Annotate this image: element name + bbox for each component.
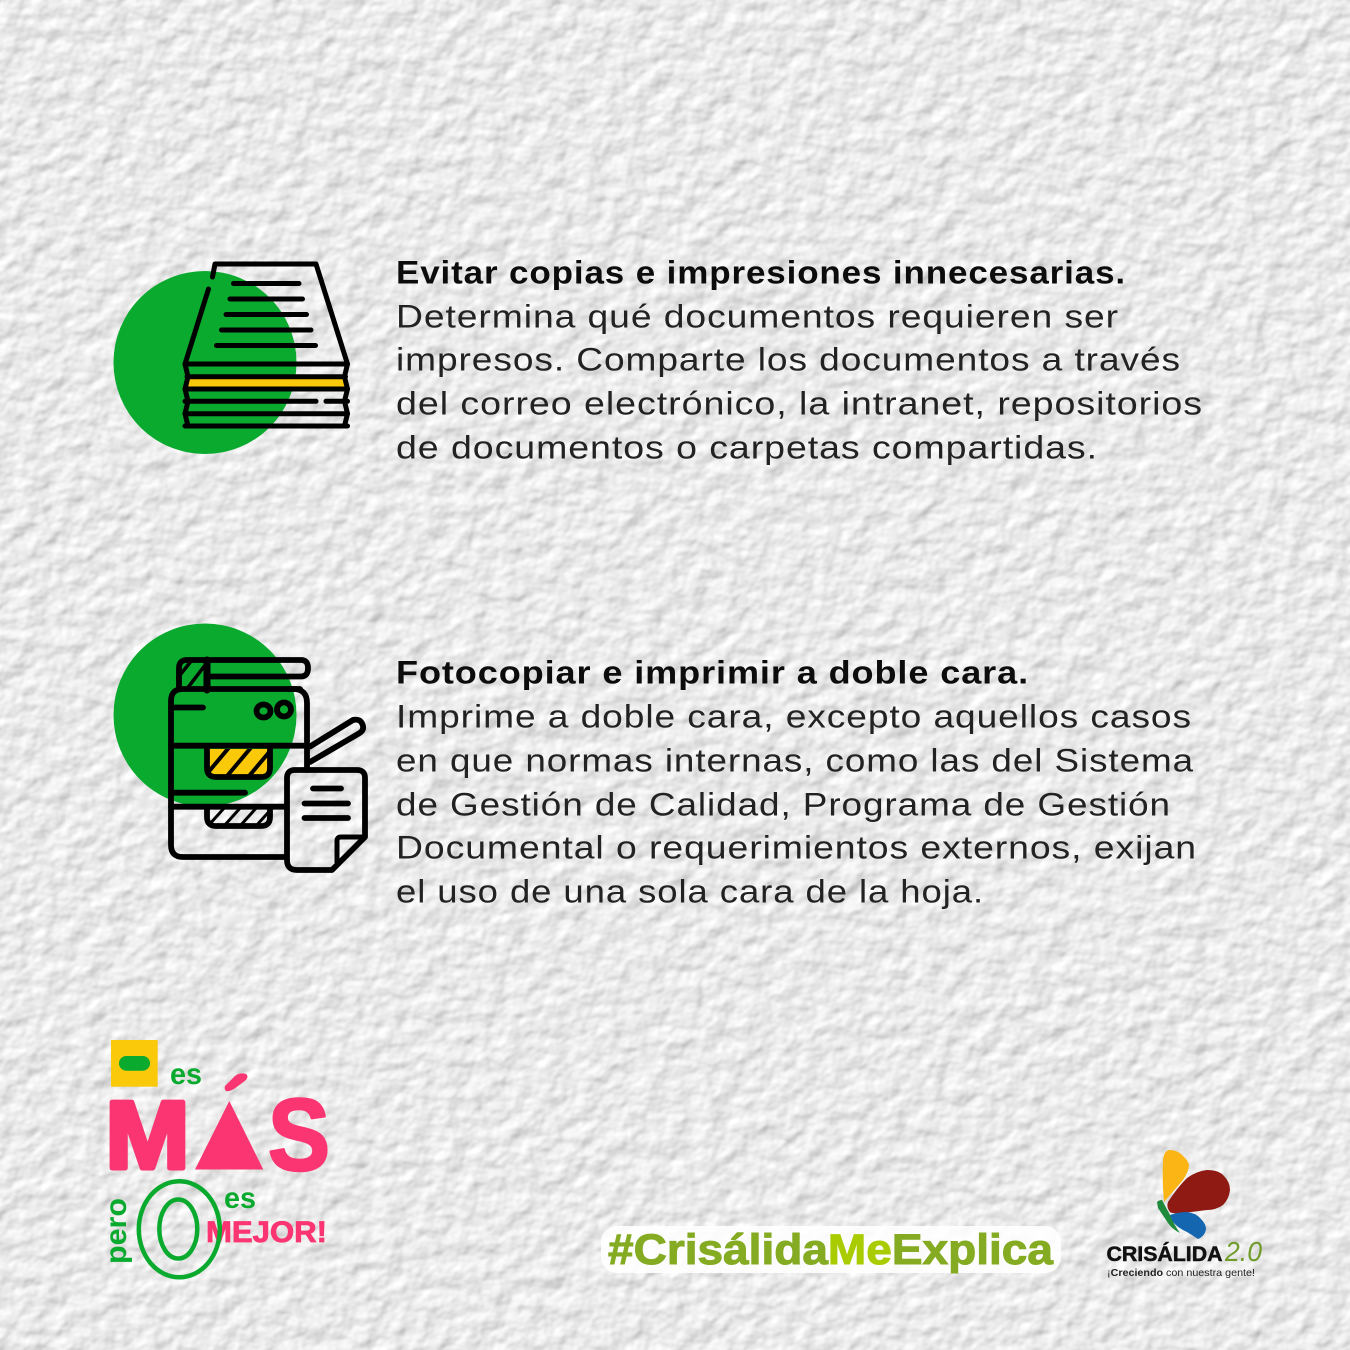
body line 3: de Gestión de Calidad, Programa de Gestión	[396, 786, 1171, 822]
word: MÁS	[106, 1073, 330, 1192]
icon: stack of paper	[114, 264, 348, 454]
icon: photocopier	[114, 624, 365, 870]
green minus pill	[119, 1056, 150, 1071]
tagline: ¡Creciendo con nuestra gente!	[1107, 1267, 1255, 1279]
printer outline	[171, 660, 363, 857]
accent	[225, 1073, 248, 1091]
icon background circle	[114, 624, 296, 806]
scanner hatching	[176, 662, 204, 686]
yellow paper slot	[208, 749, 269, 776]
Crisálida 2.0 logo	[1106, 1150, 1262, 1279]
butterfly icon	[1157, 1150, 1230, 1239]
word: MEJOR!: MEJOR!	[206, 1216, 327, 1249]
lower slot hatching	[210, 810, 268, 824]
body line 1: Determina qué documentos requieren ser	[396, 298, 1119, 334]
red wing	[1167, 1170, 1230, 1213]
triangle letter A	[195, 1101, 263, 1170]
wordmark: CRISÁLIDA: CRISÁLIDA	[1106, 1243, 1222, 1266]
yellow sheet	[188, 377, 344, 389]
slot hatching	[210, 749, 268, 774]
word: es: es	[170, 1058, 202, 1091]
body line 1: Imprime a doble cara, excepto aquellos casos	[396, 698, 1192, 734]
document with folded corner	[287, 770, 365, 870]
yellow wing	[1163, 1150, 1189, 1202]
body line 2: impresos. Comparte los documentos a través	[396, 342, 1181, 378]
blue wing	[1170, 1212, 1206, 1239]
word: pero: pero	[100, 1198, 133, 1264]
green body	[1157, 1200, 1180, 1233]
outer ring	[139, 1181, 220, 1277]
body line 4: de documentos o carpetas compartidas.	[396, 430, 1098, 466]
yellow square	[111, 1040, 158, 1087]
body line 2: en que normas internas, como las del Sistema	[396, 742, 1194, 778]
inner ring	[159, 1200, 197, 1258]
paper outline	[185, 264, 348, 426]
hashtag	[601, 1226, 1061, 1274]
heading: Fotocopiar e imprimir a doble cara.	[396, 654, 1029, 690]
campaign logo: menos es más, pero cero es mejor	[100, 1040, 330, 1277]
panel: evitar copias	[114, 254, 1203, 466]
text: doble cara	[396, 654, 1197, 910]
body line 3: del correo electrónico, la intranet, repositorios	[396, 386, 1203, 422]
body line 4: Documental o requerimientos externos, exijan	[396, 830, 1197, 866]
word: es: es	[224, 1182, 256, 1215]
letter M: M	[106, 1081, 189, 1188]
large zero ring	[139, 1181, 220, 1277]
yellow minus badge	[111, 1040, 158, 1087]
heading: Evitar copias e impresiones innecesarias.	[396, 254, 1126, 290]
version: 2.0: 2.0	[1224, 1236, 1262, 1267]
text: evitar copias	[396, 254, 1203, 466]
hashtag text: #Crisálida MeExplica	[608, 1226, 1054, 1274]
panel: doble cara	[114, 624, 1197, 910]
letter S: S	[268, 1078, 330, 1192]
body line 5: el uso de una sola cara de la hoja.	[396, 874, 984, 910]
hashtag white halo	[601, 1226, 1061, 1273]
icon background circle	[114, 271, 296, 454]
